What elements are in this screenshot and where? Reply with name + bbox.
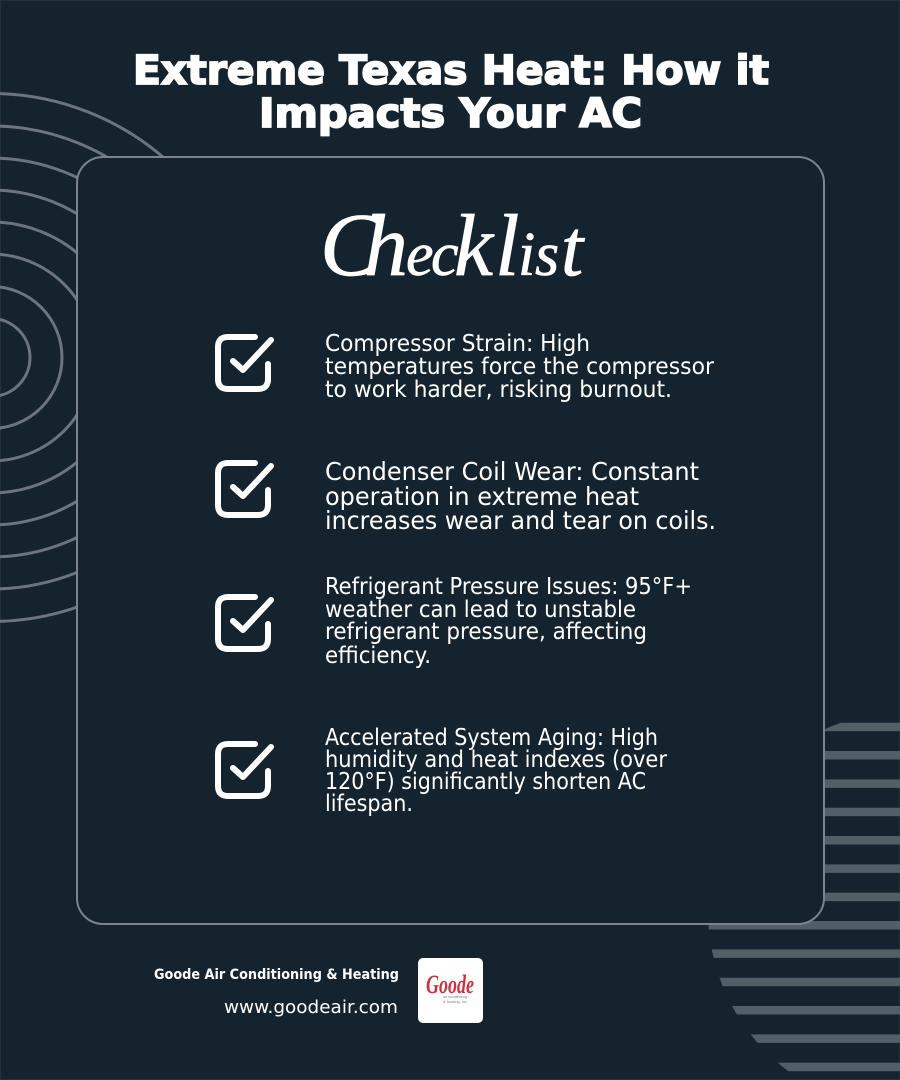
panel: checklist card	[77, 157, 824, 924]
checklist heading: C	[320, 196, 381, 295]
concentric circles decoration	[0, 94, 255, 622]
text: accelerated aging	[325, 725, 667, 817]
logo	[418, 958, 483, 1023]
text: refrigerant pressure: efficiency.	[325, 643, 431, 669]
striped circle decoration	[700, 723, 900, 1071]
text: condenser coil wear: Condenser Coil Wear: Constant	[325, 457, 699, 486]
checklist heading: t	[561, 205, 585, 293]
text: condenser coil wear: operation in extreme heat	[325, 482, 639, 511]
text: compressor strain: to work harder, risking burnout.	[325, 377, 672, 403]
item 4: accelerated aging	[218, 725, 667, 817]
icon: check box 3	[218, 597, 271, 649]
logo: air conditioning	[443, 994, 467, 999]
footer website: www.goodeair.com	[224, 997, 398, 1018]
checklist heading: s	[535, 221, 559, 289]
logo: & heating, inc	[443, 999, 467, 1004]
text: compressor strain: Compressor Strain: High	[325, 331, 590, 357]
title: Extreme Texas Heat: How it	[133, 48, 769, 94]
title: Impacts Your AC	[259, 91, 642, 137]
logo: Goode	[426, 970, 474, 999]
footer company name: Goode Air Conditioning & Heating	[154, 967, 399, 983]
icon: check box 4	[218, 744, 271, 796]
item 1: compressor strain	[218, 331, 715, 403]
text: refrigerant pressure: weather can lead to unstable	[325, 597, 636, 623]
text: accelerated aging: lifespan.	[325, 791, 413, 817]
item 2: condenser coil wear	[218, 457, 716, 535]
text: condenser coil wear: increases wear and tear on coils.	[325, 506, 716, 535]
icon: check box 2	[218, 463, 271, 515]
text: condenser coil wear	[325, 457, 716, 535]
text: accelerated aging: Accelerated System Aging: High	[325, 725, 658, 751]
checklist heading: i	[518, 221, 535, 289]
checklist heading: k	[454, 198, 495, 295]
checklist heading: h	[364, 198, 408, 295]
text: compressor strain: temperatures force the compressor	[325, 354, 715, 380]
checklist heading: c	[431, 221, 459, 289]
text: accelerated aging: 120°F) significantly shorten AC	[325, 769, 646, 795]
text: accelerated aging: humidity and heat indexes (over	[325, 747, 667, 773]
checklist heading: l	[495, 198, 519, 295]
text: refrigerant pressure: Refrigerant Pressure Issues: 95°F+	[325, 574, 692, 600]
text: refrigerant pressure: refrigerant pressure, affecting	[325, 619, 647, 645]
item 3: refrigerant pressure	[218, 574, 692, 669]
text: refrigerant pressure	[325, 574, 692, 669]
text: compressor strain	[325, 331, 715, 403]
checklist heading: e	[406, 221, 434, 289]
icon: check box 1	[218, 337, 271, 389]
title	[133, 48, 769, 137]
